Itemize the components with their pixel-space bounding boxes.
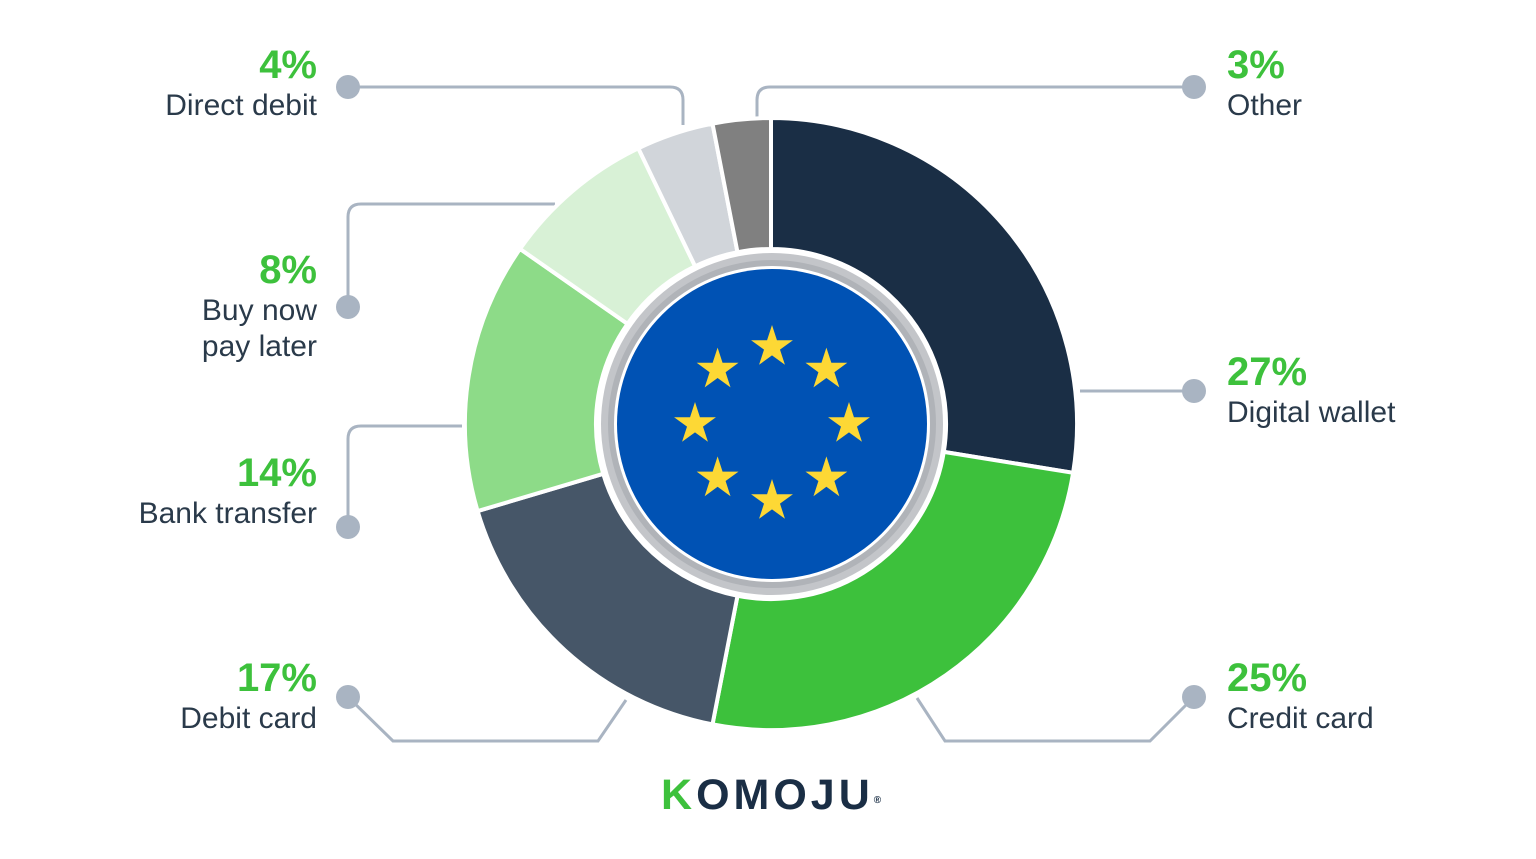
label: digital wallet: 27% [1227, 350, 1307, 394]
connectors [348, 87, 1194, 741]
label: bank transfer: 14% [237, 451, 317, 495]
label: credit card: 25% [1227, 656, 1307, 700]
label: direct debit: 4% [259, 43, 317, 87]
label: buy now pay later [202, 248, 318, 363]
donut segments [465, 118, 1077, 730]
label: bank transfer [139, 451, 317, 530]
label: buy now pay later: Buy now [202, 294, 317, 327]
label: direct debit [165, 43, 317, 122]
connector dots [336, 75, 1206, 709]
label: bank transfer: Bank transfer [139, 497, 317, 530]
label: direct debit: Direct debit [165, 89, 317, 122]
label: buy now pay later: pay later [202, 330, 317, 363]
label: other [1227, 43, 1302, 122]
label: debit card: Debit card [180, 702, 317, 735]
label: credit card [1227, 656, 1374, 735]
label: debit card [180, 656, 317, 735]
label: buy now pay later: 8% [259, 248, 317, 292]
label: debit card: 17% [237, 656, 317, 700]
logo: KOMOJU® [661, 771, 881, 819]
label: other: 3% [1227, 43, 1285, 87]
label: digital wallet: Digital wallet [1227, 396, 1395, 429]
label: other: Other [1227, 89, 1302, 122]
label: digital wallet [1227, 350, 1396, 429]
EU flag center [598, 250, 946, 598]
label: credit card: Credit card [1227, 702, 1374, 735]
